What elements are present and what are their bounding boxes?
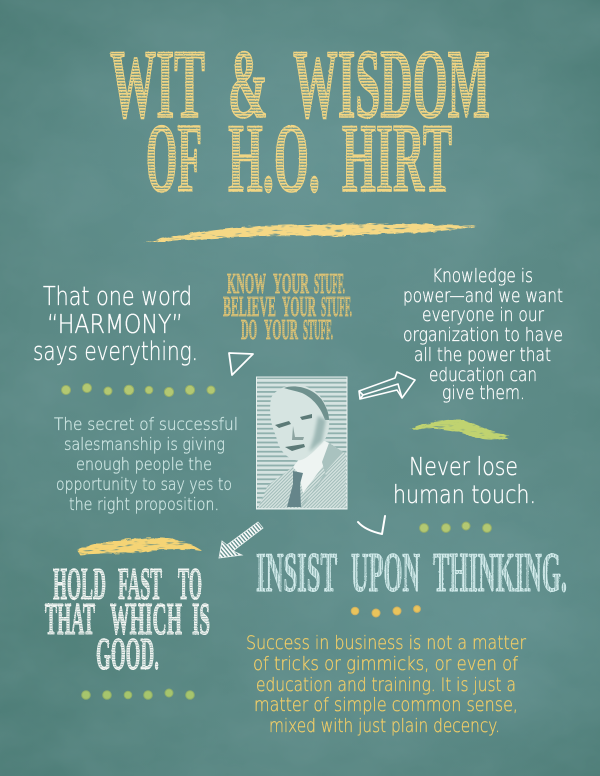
title: WIT	[110, 30, 205, 139]
quote: harmony: says everything.	[33, 337, 198, 367]
title: H.O.	[228, 104, 320, 213]
quote: knowledge is power: give them.	[442, 382, 525, 404]
infographic page: TO	[178, 558, 202, 609]
quote: insist upon thinking: INSIST	[256, 542, 337, 604]
title: HIRT	[342, 104, 452, 213]
green dot divider bottom left	[82, 689, 194, 699]
quote: know your stuff	[223, 269, 352, 346]
infographic page: STUFF.	[314, 269, 345, 300]
quote: hold fast: HOLD	[53, 558, 106, 609]
quote: know your stuff: YOUR	[264, 315, 298, 346]
eyes, nose and mouth	[275, 414, 312, 451]
quote: knowledge is power	[403, 265, 563, 404]
quote: knowledge is power: power—and we want	[403, 285, 563, 307]
quote: secret of salesmanship	[54, 415, 238, 515]
icon: triangle pointer	[229, 353, 253, 375]
quote: success in business: education and training. It is just a	[256, 674, 516, 696]
quote: know your stuff: BELIEVE	[223, 292, 276, 323]
quote: never lose human touch	[393, 452, 536, 509]
quote: know your stuff: STUFF.	[303, 315, 333, 346]
green dot divider right	[420, 522, 491, 532]
quote: never lose human touch: human touch.	[393, 480, 536, 509]
quote: success in business: of tricks or gimmicks, or even of	[253, 653, 518, 675]
icon: hatched arrow down-left	[219, 522, 263, 558]
face shading	[309, 416, 326, 452]
quote: know your stuff: YOUR	[273, 269, 309, 300]
portrait of H.O. Hirt	[256, 377, 347, 509]
quote: hold fast	[45, 558, 210, 679]
yellow chalk swoosh left	[77, 538, 201, 555]
quote: hold fast: WHICH	[110, 593, 182, 644]
head	[270, 385, 329, 460]
quote: never lose human touch: Never lose	[409, 452, 518, 481]
quote: success in business	[246, 632, 526, 737]
green dot divider left	[62, 384, 215, 397]
quote: knowledge is power: organization to have	[403, 324, 563, 346]
quote: harmony	[33, 282, 198, 367]
quote: hold fast: THAT	[45, 593, 95, 644]
quote: harmony: “HARMONY”	[47, 310, 183, 340]
quote: success in business: mixed with just plain decency.	[269, 715, 500, 737]
shirt collar	[293, 440, 329, 493]
quote: secret of salesmanship: the right proposition.	[69, 495, 219, 515]
quote: knowledge is power: all the power that	[414, 344, 551, 366]
quote: secret of salesmanship: The secret of successful	[54, 415, 238, 435]
lapel shading	[300, 443, 343, 507]
quote: knowledge is power: everyone in our	[422, 304, 544, 326]
hair	[284, 386, 329, 420]
infographic page: IS	[192, 593, 210, 644]
quote: know your stuff: YOUR	[282, 292, 316, 323]
quote: hold fast: FAST	[118, 558, 162, 609]
icon: check mark	[358, 516, 385, 534]
title: &	[228, 30, 268, 139]
quote: insist upon thinking: UPON	[351, 542, 420, 604]
yellow chalk swoosh under title	[144, 224, 477, 243]
title	[110, 30, 490, 213]
tie	[287, 471, 303, 507]
quote: harmony: That one word	[43, 282, 192, 312]
quote: secret of salesmanship: opportunity to say yes to	[56, 475, 232, 495]
quote: secret of salesmanship: enough people the	[76, 455, 212, 475]
quote: success in business: matter of simple common sense,	[254, 694, 518, 716]
quote: knowledge is power: Knowledge is	[432, 265, 533, 287]
quote: know your stuff: KNOW	[227, 269, 266, 300]
quote: success in business: Success in business is not a matter	[246, 632, 526, 654]
quote: knowledge is power: education can	[429, 364, 537, 386]
quote: insist upon thinking	[256, 542, 567, 604]
quote: secret of salesmanship: salesmanship is giving	[64, 435, 225, 455]
title: OF	[146, 104, 202, 213]
green chalk swoosh	[410, 420, 510, 440]
quote: hold fast: GOOD.	[96, 628, 159, 679]
icon: outline arrow right	[359, 372, 415, 399]
infographic page: STUFF.	[321, 292, 352, 323]
suit jacket	[258, 442, 346, 508]
orange dot divider	[351, 606, 420, 617]
quote: know your stuff: DO	[241, 315, 257, 346]
